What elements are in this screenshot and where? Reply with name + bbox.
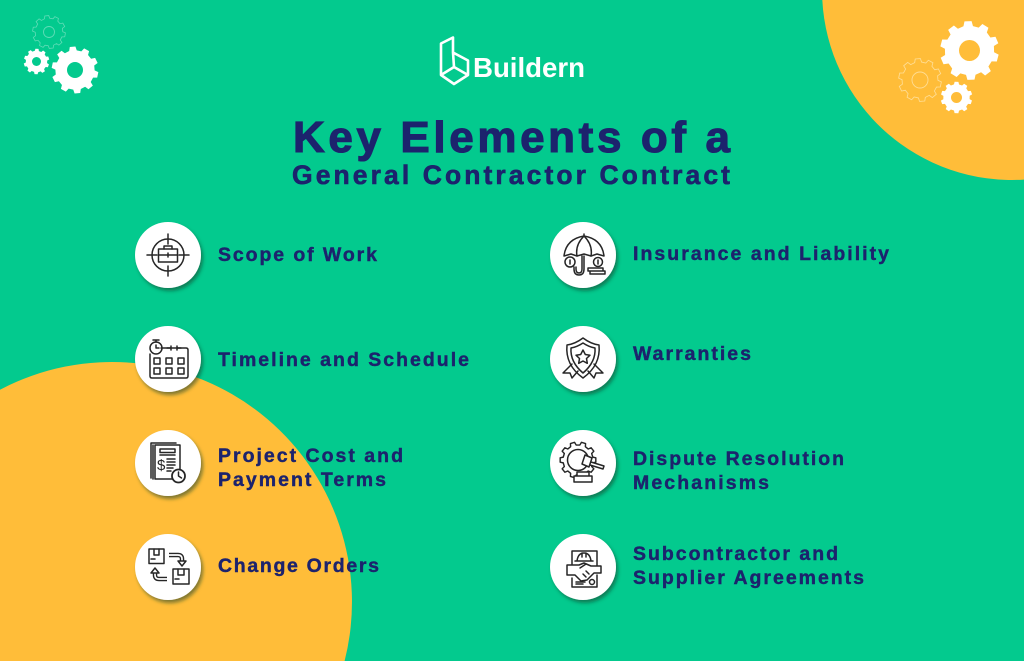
item: Project Cost and Payment Terms — [135, 430, 403, 496]
label: Dispute Resolution — [633, 448, 844, 470]
button with target icon — [135, 222, 201, 288]
item: Timeline and Schedule — [135, 326, 469, 392]
label: Change Orders — [218, 555, 379, 577]
logo: Buildern: Buildern — [473, 52, 585, 83]
button with invoice icon — [135, 430, 201, 496]
item: Warranties — [550, 326, 751, 392]
label: Warranties — [633, 343, 751, 365]
label: Timeline and Schedule — [218, 349, 469, 371]
item: Subcontractor and Supplier Agreements — [550, 534, 864, 600]
yellow circle: bottom left — [0, 362, 352, 661]
item: Insurance and Liability — [550, 222, 889, 288]
item: Scope of Work — [135, 222, 377, 288]
item: Dispute Resolution Mechanisms — [550, 430, 844, 496]
icon: gears top right — [895, 15, 1005, 117]
label: Subcontractor and — [633, 543, 838, 565]
item: Change Orders — [135, 534, 379, 600]
label: Payment Terms — [218, 469, 386, 491]
yellow circle: top right — [822, 0, 1024, 180]
label: Project Cost and — [218, 445, 403, 467]
label — [633, 448, 844, 494]
button with exchange icon — [135, 534, 201, 600]
label — [633, 543, 864, 589]
label — [218, 445, 403, 491]
title: Key Elements of a — [293, 113, 731, 162]
icon: gears top left — [20, 13, 103, 97]
subtitle: General Contractor Contract — [292, 160, 730, 190]
label: Mechanisms — [633, 472, 769, 494]
button with calendar icon — [135, 326, 201, 392]
label: Scope of Work — [218, 244, 377, 266]
button with umbrella icon — [550, 222, 616, 288]
label: Insurance and Liability — [633, 243, 889, 265]
button with shield icon — [550, 326, 616, 392]
button with invoice icon: $ — [157, 457, 166, 474]
logo: Buildern — [441, 38, 585, 84]
label: Supplier Agreements — [633, 567, 864, 589]
button with handshake contract icon — [550, 534, 616, 600]
button with gavel and gear icon — [550, 430, 616, 496]
